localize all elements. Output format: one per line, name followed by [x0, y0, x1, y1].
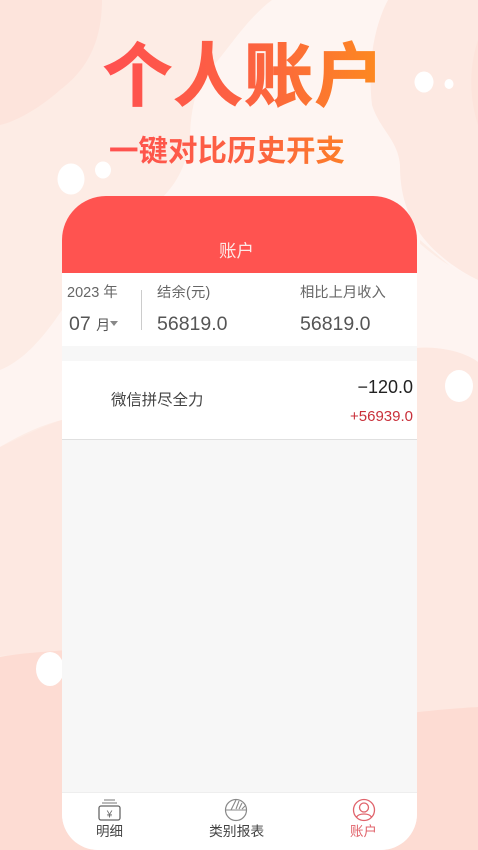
balance value: 56819.0	[157, 313, 228, 335]
label: 明细	[96, 824, 123, 839]
balance change: +56939.0	[350, 408, 413, 425]
icon: user	[352, 798, 376, 822]
summary panel	[62, 273, 417, 346]
comparison value: 56819.0	[300, 313, 370, 335]
title: 个人账户	[103, 38, 385, 115]
divider	[141, 290, 142, 330]
nav item: details	[96, 800, 123, 839]
month selector: 07 月	[69, 313, 110, 335]
red header	[62, 196, 417, 273]
subtitle: 一键对比历史开支	[109, 135, 345, 168]
balance label: 结余(元)	[157, 285, 210, 301]
header title: 账户	[219, 241, 254, 261]
nav item: account	[350, 798, 377, 839]
label: 账户	[350, 824, 377, 839]
nav item: category report	[209, 798, 264, 839]
icon: pie chart	[224, 798, 248, 822]
account row	[62, 361, 417, 440]
title	[103, 38, 385, 168]
phone card	[62, 196, 417, 850]
comparison label: 相比上月收入	[300, 285, 386, 301]
icon: money box	[98, 800, 121, 821]
amount: −120.0	[357, 377, 413, 397]
label: 类别报表	[209, 824, 264, 839]
icon: money box: ¥	[106, 810, 113, 820]
bottom navigation	[62, 792, 417, 850]
account name: 微信拼尽全力	[111, 392, 203, 409]
year label: 2023 年	[67, 285, 118, 301]
